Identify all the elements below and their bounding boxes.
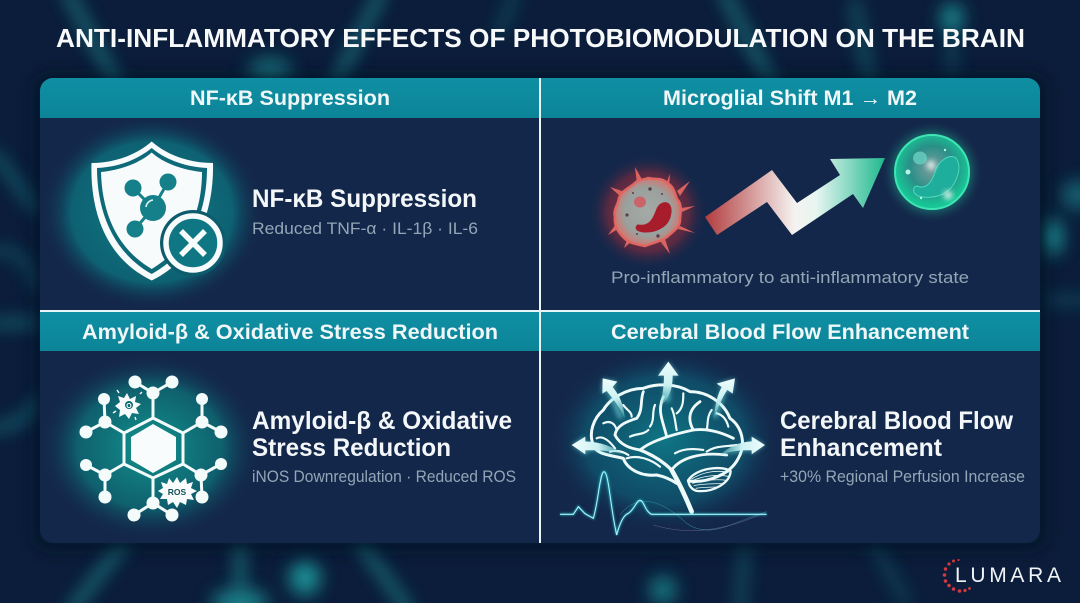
title: ANTI-INFLAMMATORY EFFECTS OF PHOTOBIOMODULATION ON THE BRAIN bbox=[56, 23, 1025, 53]
arrow: M1 to M2 bbox=[705, 158, 885, 235]
header: amyloid and oxidative stress: Amyloid-β & Oxidative Stress Reduction bbox=[82, 321, 498, 344]
icon: ROS burst bbox=[158, 477, 197, 508]
logo dots bbox=[943, 559, 971, 593]
cell glow bbox=[52, 124, 252, 300]
text: cytokines: Reduced TNF-α · IL-1β · IL-6 bbox=[252, 219, 478, 238]
icon: M2 microglia bbox=[883, 126, 978, 218]
logo: Lumara bbox=[943, 559, 1061, 593]
header: amyloid and oxidative stress bbox=[40, 312, 540, 351]
panel: NF-kB suppression bbox=[40, 78, 540, 310]
heading: amyloid and oxidative stress bbox=[252, 411, 512, 456]
flow arrows bbox=[572, 362, 765, 456]
text: iNOS and ROS: iNOS Downregulation · Reduced ROS bbox=[252, 467, 516, 486]
cell glow bbox=[53, 366, 247, 528]
icon: molecular network bbox=[80, 376, 228, 522]
icon: M1 microglia bbox=[594, 160, 702, 264]
heading: cerebral blood flow: Enhancement bbox=[780, 434, 943, 462]
text: state change: Pro-inflammatory to anti-inflammatory state bbox=[611, 268, 969, 287]
header: NF-kB suppression: NF-κB Suppression bbox=[190, 87, 390, 110]
heading: NF-kB suppression: NF-κB Suppression bbox=[252, 185, 477, 213]
cell glow bbox=[565, 360, 765, 520]
panel: microglial shift bbox=[540, 78, 1040, 287]
icon: brain with flow arrows bbox=[560, 362, 767, 535]
icon: shield with molecule and cross bbox=[91, 142, 226, 280]
logo wordmark: LUMARA bbox=[955, 564, 1061, 587]
brain outline bbox=[591, 385, 742, 512]
header: microglial shift bbox=[540, 78, 1040, 118]
molecule bbox=[124, 174, 176, 238]
heading: cerebral blood flow bbox=[781, 411, 1013, 456]
grid dividers bbox=[40, 78, 1040, 543]
icon: radical burst: O bbox=[126, 403, 132, 410]
header: cerebral blood flow: Cerebral Blood Flow Enhancement bbox=[611, 321, 969, 344]
text: perfusion increase: +30% Regional Perfusion Increase bbox=[780, 467, 1025, 486]
heading: amyloid and oxidative stress: Amyloid-β & Oxidative bbox=[252, 407, 512, 435]
heading: amyloid and oxidative stress: Stress Reduction bbox=[252, 434, 451, 462]
icon: radical burst bbox=[113, 390, 142, 420]
header: cerebral blood flow bbox=[540, 312, 1040, 351]
main panel bbox=[38, 78, 1040, 543]
cross badge bbox=[160, 210, 226, 276]
header: NF-kB suppression bbox=[40, 78, 540, 118]
panel: cerebral blood flow bbox=[540, 312, 1040, 535]
panel: amyloid and oxidative stress bbox=[38, 312, 540, 541]
icon: ROS burst: ROS bbox=[168, 487, 187, 497]
pulse line bbox=[560, 472, 767, 535]
header: microglial shift: Microglial Shift M1 → M2 bbox=[663, 87, 917, 110]
heading: cerebral blood flow: Cerebral Blood Flow bbox=[780, 407, 1014, 435]
